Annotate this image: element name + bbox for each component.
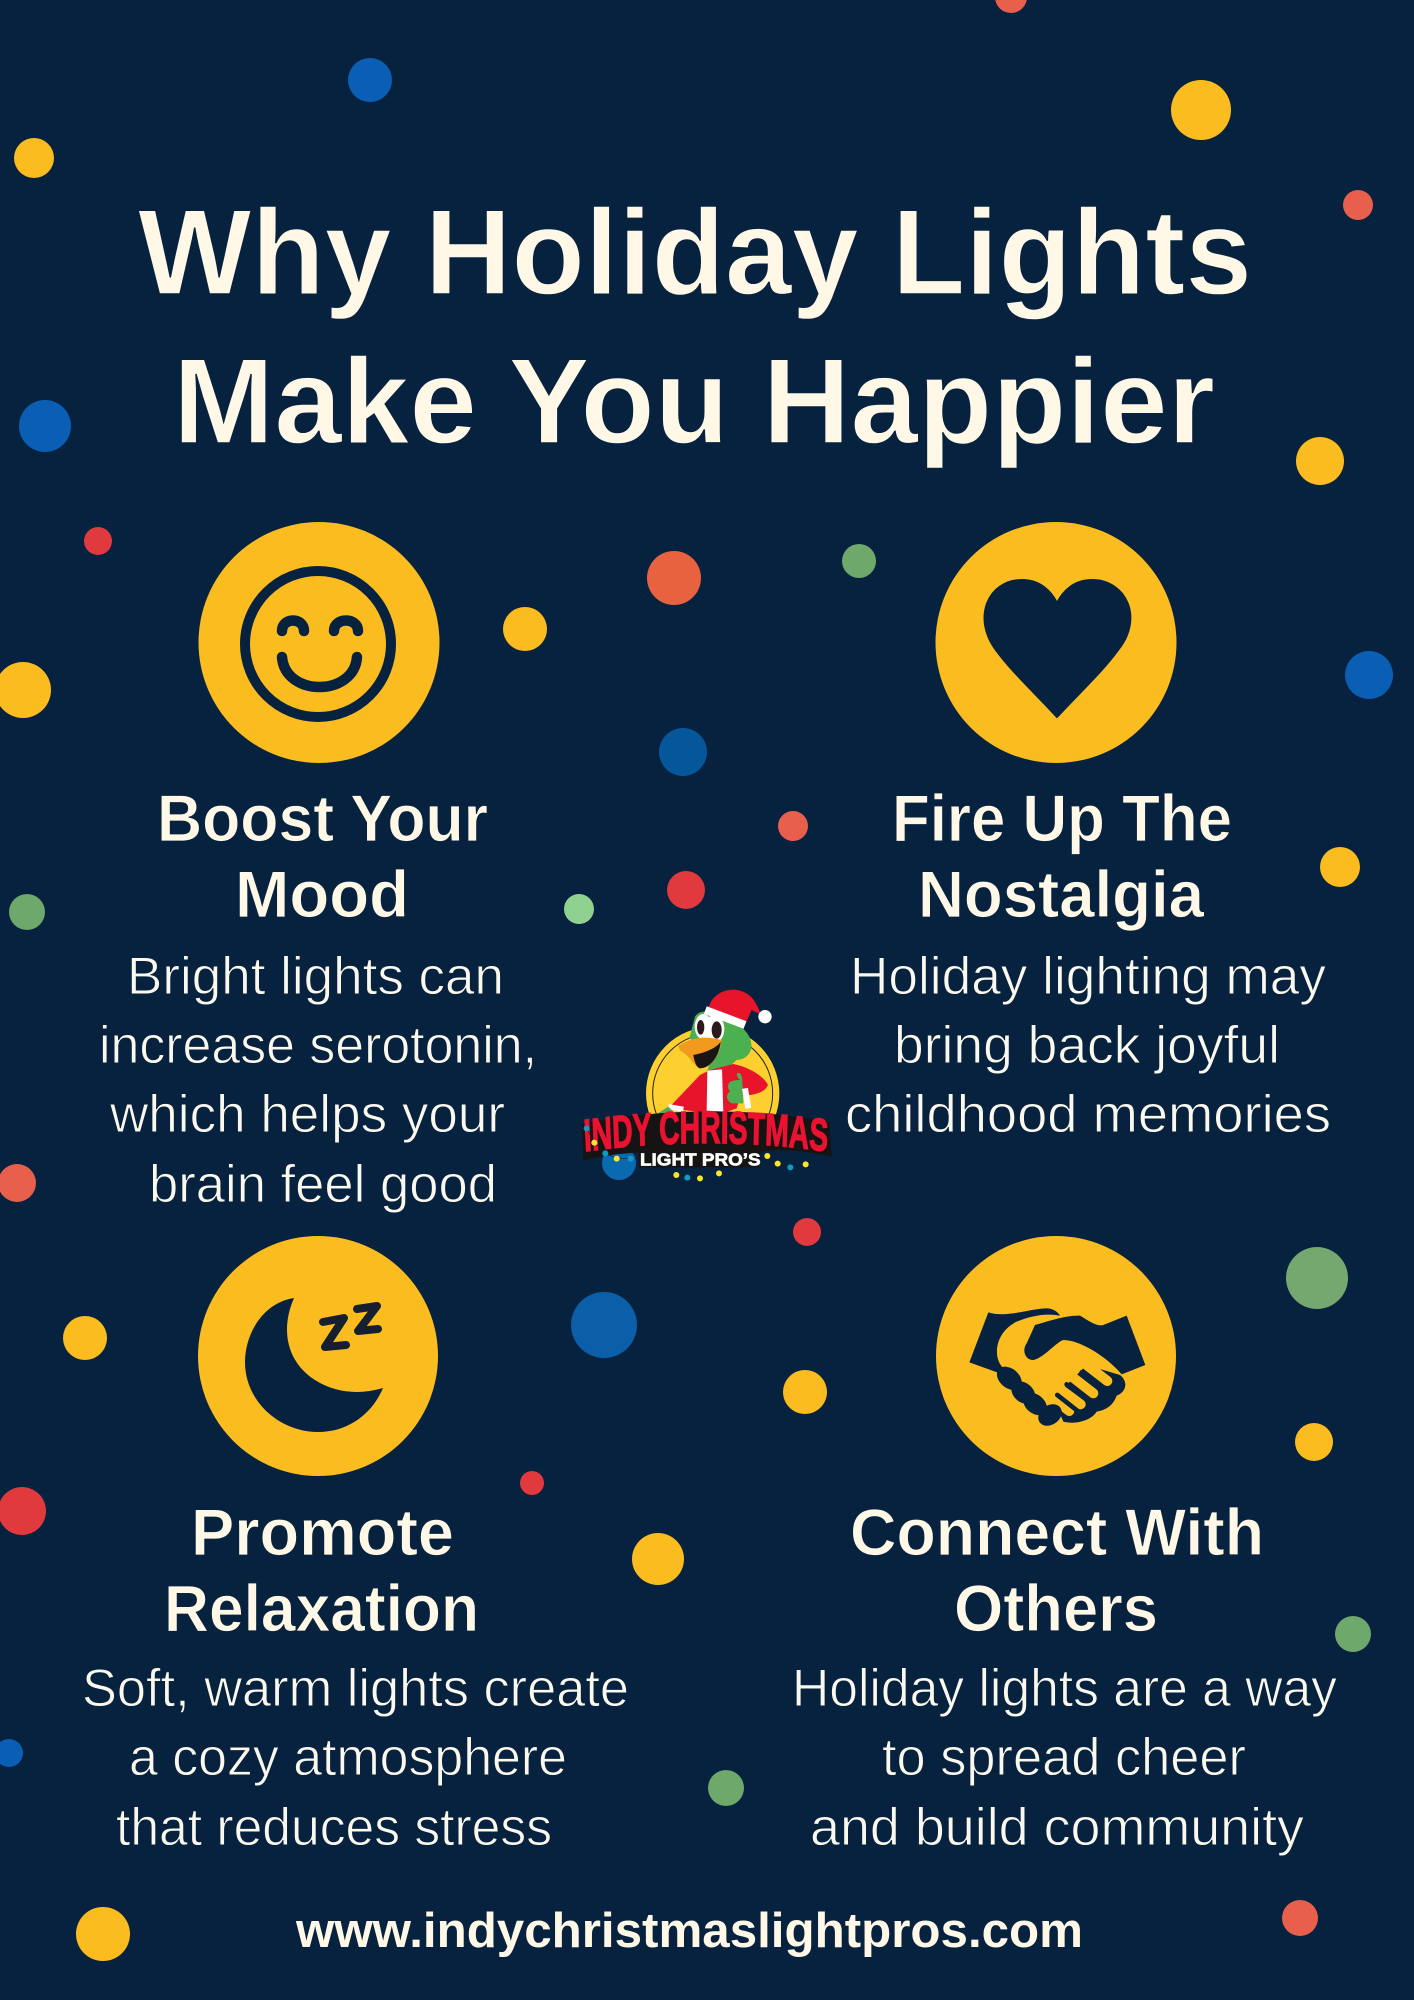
body text: that reduces stress — [116, 1798, 552, 1857]
string lights — [584, 1125, 809, 1181]
body text: and build community — [810, 1798, 1304, 1857]
title — [138, 184, 1252, 469]
title: Why Holiday Lights — [138, 184, 1252, 320]
panel: fire up the nostalgia — [845, 522, 1331, 1144]
body text — [82, 1659, 629, 1857]
body text — [99, 947, 537, 1214]
logo: Indy Christmas Light Pro's — [582, 990, 832, 1182]
body text — [792, 1659, 1337, 1857]
heading — [164, 1495, 479, 1645]
body text: bring back joyful — [894, 1016, 1280, 1075]
icon: moon with zz — [198, 1236, 438, 1476]
body text: which helps your — [109, 1085, 505, 1144]
heading: Nostalgia — [918, 857, 1205, 931]
body text: Holiday lighting may — [850, 947, 1326, 1006]
heading: Others — [954, 1571, 1158, 1645]
icon: heart — [936, 522, 1176, 763]
heading: Connect With — [850, 1495, 1264, 1569]
logo band — [582, 1111, 832, 1167]
logo wordmark: INDY CHRISTMAS — [584, 1110, 828, 1152]
icon: smiley face — [198, 522, 440, 763]
heading: Boost Your — [157, 781, 488, 855]
body text: brain feel good — [149, 1155, 497, 1214]
logo badge circle — [646, 1027, 779, 1160]
body text: Holiday lights are a way — [792, 1659, 1337, 1718]
website url: www.indychristmaslightpros.com — [295, 1904, 1083, 1958]
icon: handshake — [936, 1236, 1176, 1476]
body text: a cozy atmosphere — [129, 1728, 567, 1787]
panel: boost your mood — [99, 522, 537, 1214]
panel: connect with others — [792, 1236, 1337, 1857]
body text: childhood memories — [845, 1085, 1331, 1144]
body text: increase serotonin, — [99, 1016, 537, 1075]
body text: Soft, warm lights create — [82, 1659, 629, 1718]
panel: promote relaxation — [82, 1236, 629, 1857]
heading: Relaxation — [164, 1571, 479, 1645]
duck mascot — [655, 990, 772, 1118]
body text: Bright lights can — [127, 947, 504, 1006]
heading — [892, 781, 1232, 931]
heading — [157, 781, 488, 931]
heading: Promote — [191, 1495, 454, 1569]
heading: Fire Up The — [892, 781, 1232, 855]
heading: Mood — [235, 857, 409, 931]
body text — [845, 947, 1331, 1144]
title: Make You Happier — [173, 333, 1215, 469]
heading — [850, 1495, 1264, 1645]
logo tagline: LIGHT PRO’S — [640, 1149, 761, 1169]
body text: to spread cheer — [882, 1728, 1246, 1787]
